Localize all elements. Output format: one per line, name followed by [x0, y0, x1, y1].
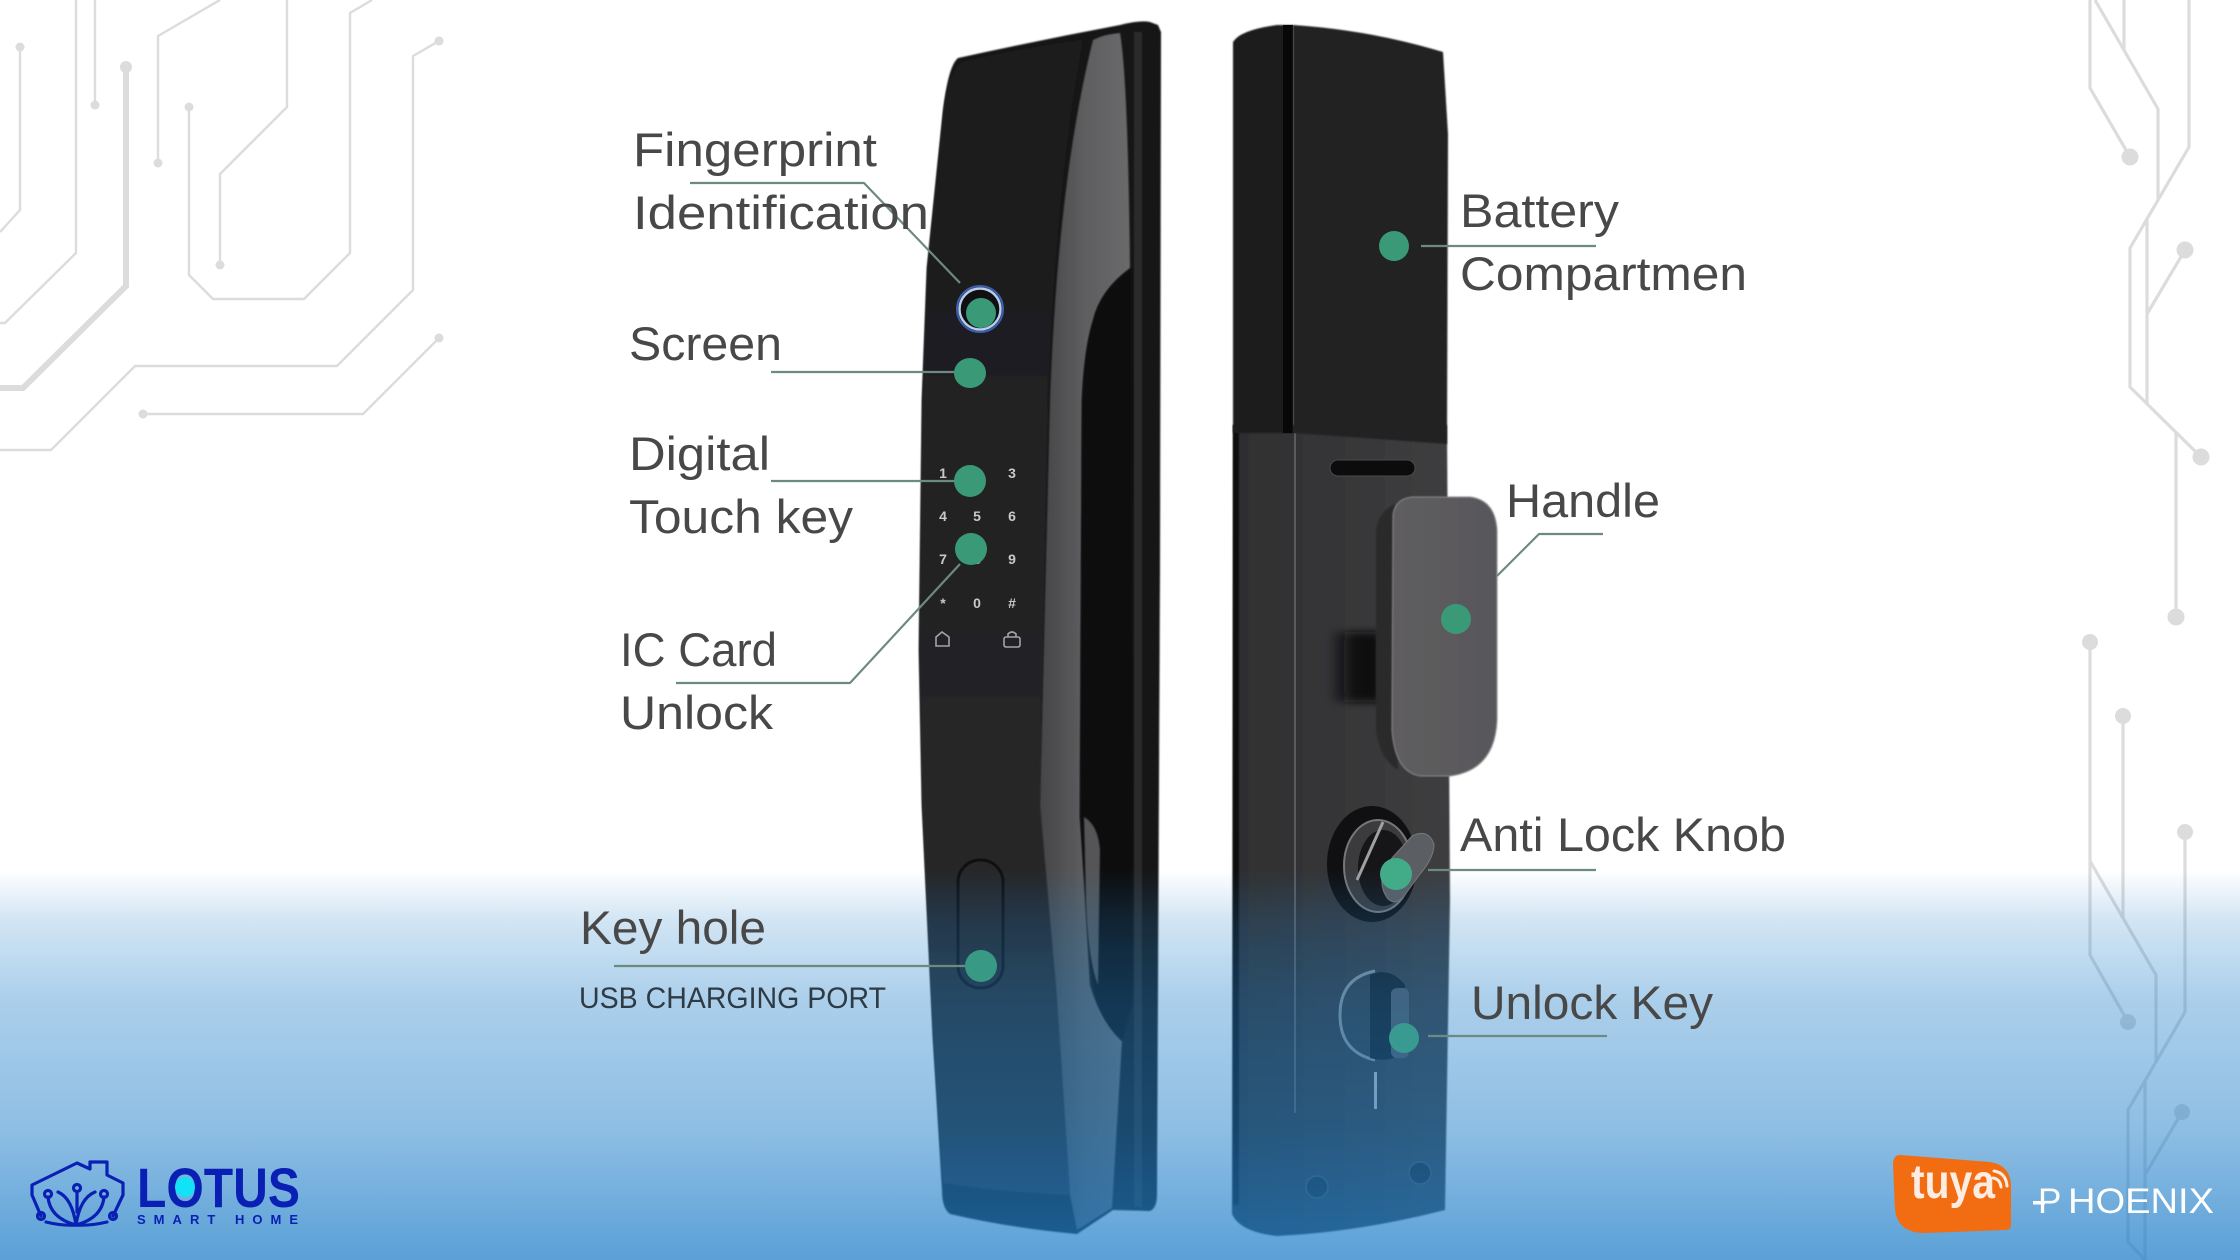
- logo: Phoenix: P: [2038, 1182, 2061, 1221]
- feature labels: Identification: [633, 186, 929, 239]
- blue gradient overlay: [0, 870, 2240, 1260]
- keypad digits: *: [940, 595, 946, 611]
- keypad digits: 9: [1008, 551, 1016, 567]
- speaker slot: [1330, 460, 1415, 476]
- key slit: [1374, 1072, 1377, 1109]
- feature labels: Battery: [1460, 184, 1620, 237]
- feature labels: Fingerprint: [633, 123, 877, 176]
- rear rails: [1233, 25, 1293, 433]
- lock: back panel (right device): [1232, 25, 1497, 1236]
- front panel body: [919, 21, 1161, 1234]
- feature labels: Touch key: [629, 490, 854, 543]
- feature labels: Compartmen: [1460, 247, 1747, 300]
- feature labels: Handle: [1506, 474, 1660, 527]
- plate rails: [1233, 425, 1239, 1205]
- cyan dot: [175, 1177, 195, 1197]
- feature labels: USB CHARGING PORT: [579, 982, 886, 1015]
- badge: [1893, 1155, 2011, 1233]
- badge wordmark: tuya: [1911, 1156, 1995, 1209]
- wifi arcs: [1993, 1171, 2007, 1187]
- keypad digits: #: [1008, 595, 1016, 611]
- feature labels: Key hole: [580, 901, 766, 954]
- feature labels: Unlock Key: [1471, 976, 1713, 1029]
- handle neck: [1328, 632, 1380, 702]
- screws: [1306, 1162, 1431, 1198]
- grip highlight strip: [1040, 33, 1130, 1230]
- feature labels: Anti Lock Knob: [1460, 808, 1786, 861]
- keypad digits: 6: [1008, 508, 1016, 524]
- keypad digits: 7: [939, 551, 947, 567]
- key hole cover: [958, 860, 1003, 988]
- logo: Phoenix: HOENIX: [2068, 1182, 2214, 1221]
- rail shadow: [1283, 25, 1293, 433]
- feature labels: Screen: [629, 317, 782, 370]
- anti lock knob: [1327, 806, 1434, 922]
- fingerprint ring: [957, 286, 1003, 332]
- keypad digits: 5: [973, 508, 981, 524]
- battery cover: [1293, 25, 1448, 444]
- keypad digits: 1: [939, 465, 947, 481]
- circuit pattern: right: [2082, 0, 2210, 1260]
- plate highlight line: [1294, 433, 1296, 1113]
- unlock key: [1340, 971, 1409, 1060]
- handle face: [1392, 497, 1497, 776]
- handle side: [1376, 504, 1398, 770]
- keypad icons: [936, 632, 1020, 647]
- recess highlight: [1084, 817, 1100, 985]
- icon: lotus house: [32, 1162, 123, 1225]
- wordmark: LOTUS: [137, 1156, 300, 1219]
- feature labels: Unlock: [620, 686, 774, 739]
- handle recess: [1080, 268, 1133, 1041]
- keypad digits: 3: [1008, 465, 1016, 481]
- keypad digits: 8: [973, 551, 981, 567]
- keypad digits: 4: [939, 508, 947, 524]
- keypad digits: [939, 465, 1016, 611]
- front face: [919, 40, 1083, 1195]
- lower plate: [1232, 425, 1450, 1236]
- feature labels: IC Card: [620, 623, 777, 676]
- keypad digits: 2: [973, 465, 981, 481]
- lock: front panel (left device): [919, 21, 1161, 1234]
- circuit pattern: left: [0, 0, 444, 450]
- logo: tuya: [1893, 1155, 2011, 1233]
- keypad digits: 0: [973, 595, 981, 611]
- logo: Lotus Smart Home: [32, 1156, 300, 1227]
- green marker dots: [954, 231, 1471, 1053]
- side band: [1134, 32, 1142, 1207]
- leader lines: [614, 183, 1607, 1036]
- feature labels: [579, 123, 1786, 1029]
- tagline: SMART HOME: [137, 1212, 298, 1227]
- feature labels: Digital: [629, 427, 770, 480]
